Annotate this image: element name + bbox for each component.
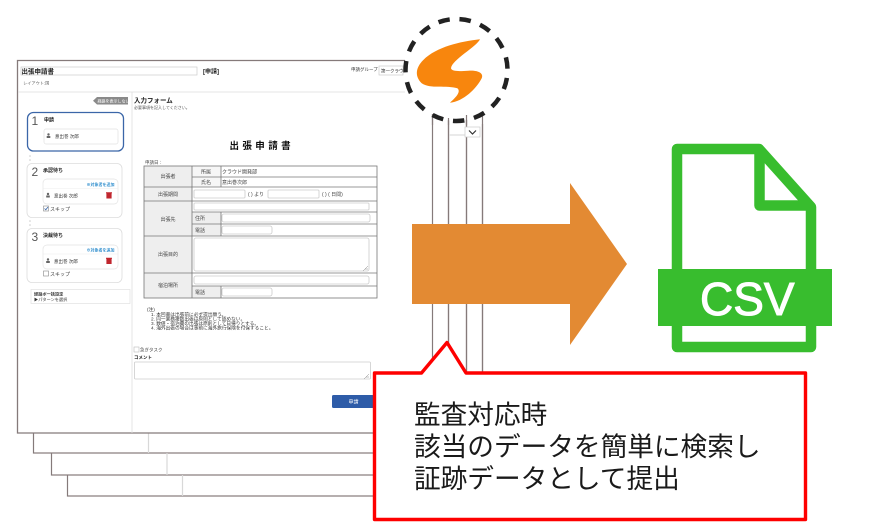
icon: trash — [106, 192, 112, 198]
application table — [144, 166, 377, 298]
sidebar: step 3: 決裁待ち — [43, 232, 63, 239]
urgent checkbox and comment — [134, 346, 370, 379]
sidebar: route toggle button: 経路を表示しない — [98, 98, 130, 104]
window header — [21, 66, 404, 86]
submit button: 申請 — [348, 398, 359, 406]
input form heading — [134, 96, 190, 110]
input form heading: 必要事項を記入してください。 — [134, 104, 190, 110]
application table: 宿泊場所 — [158, 282, 178, 289]
sidebar: route batch setting: 経路ボ一括設定 — [34, 290, 64, 298]
sidebar: step 3: 3 — [32, 230, 38, 244]
dashed circle with orange logo — [406, 19, 508, 125]
application table: ( ) ( 日間) — [322, 192, 343, 198]
application table: 電話 — [195, 289, 205, 296]
sidebar: step 2 — [27, 164, 122, 218]
application table: 意出巻次郎 — [222, 179, 247, 186]
sidebar: step 1: 1 — [32, 114, 38, 128]
notes: 3. 数値・宿泊費の出張は原則として日帰りとする。 — [151, 320, 259, 327]
application table: 出張者 — [160, 173, 176, 180]
application table: クラウド開発部 — [222, 168, 257, 176]
sidebar: step 3: ⊕対象者を追加 — [86, 246, 114, 252]
sidebar: step 2: 承認待ち — [43, 167, 63, 174]
icon: CSV file — [658, 149, 832, 347]
application table: 住所 — [195, 215, 205, 222]
notes: 1. 本回書は出張前に必ず提出願う。 — [151, 311, 226, 318]
application table: 出張目的 — [158, 251, 178, 258]
input form heading: 入力フォーム — [134, 96, 173, 104]
callout: 監査対応時 — [414, 400, 547, 430]
urgent checkbox and comment: コメント — [134, 355, 152, 360]
callout: 証跡データとして提出 — [414, 464, 680, 494]
notes: 4. 海外出張の場合は事前に海外旅行保険を付保すること。 — [151, 324, 273, 332]
sidebar: step 1 — [28, 112, 124, 151]
notes: 2. 同一業務複数出張は原則として認めない。 — [151, 316, 245, 322]
sidebar: step 1: 申請 — [44, 116, 54, 124]
sidebar: step 2: スキップ — [50, 207, 70, 213]
sidebar: step 2: 2 — [32, 165, 38, 179]
urgent checkbox and comment: 急ぎタスク — [140, 346, 162, 354]
stacked document windows behind the form — [34, 100, 482, 496]
sidebar: step 3: 意出巻 次郎 — [54, 258, 78, 265]
application table: 電話 — [195, 227, 205, 234]
main application form window — [18, 60, 422, 433]
callout: 該当のデータを簡単に検索し — [414, 432, 761, 462]
sidebar: route batch setting — [31, 290, 130, 304]
window header: 申請グループ — [351, 66, 378, 73]
window header: [申請] — [203, 68, 219, 76]
icon: CSV file: CSV — [700, 273, 795, 325]
sidebar: step 3 — [27, 228, 122, 282]
submit button — [332, 395, 374, 408]
application table: ( ) より — [248, 192, 264, 198]
icon: orange logo — [417, 39, 482, 103]
window header: レイアウト:国 — [23, 80, 49, 86]
application table: 出張先 — [160, 216, 176, 223]
application table: 出張期間 — [158, 191, 178, 198]
sidebar: step 3: スキップ — [50, 272, 70, 278]
document title: 出張申請書 — [230, 140, 294, 152]
icon: trash — [106, 258, 112, 264]
window header: 第一クラウ — [381, 68, 404, 74]
notes: (注) — [147, 306, 155, 313]
main application form window: 申請日： — [145, 159, 163, 166]
window header: 出張申請書 — [22, 66, 54, 76]
sidebar: route toggle button — [93, 97, 130, 104]
callout — [374, 342, 806, 520]
notes — [147, 306, 273, 332]
sidebar: step 1: 意出巻 次郎 — [55, 133, 79, 140]
sidebar: step 2: ⊕対象者を追加 — [86, 181, 114, 187]
orange arrow — [412, 183, 627, 345]
application table: 所属 — [201, 168, 211, 176]
application table: 氏名 — [201, 179, 211, 186]
sidebar: route batch setting: ▶パターンを選択 — [34, 296, 68, 303]
sidebar: step 2: 意出巻 次郎 — [54, 192, 78, 200]
